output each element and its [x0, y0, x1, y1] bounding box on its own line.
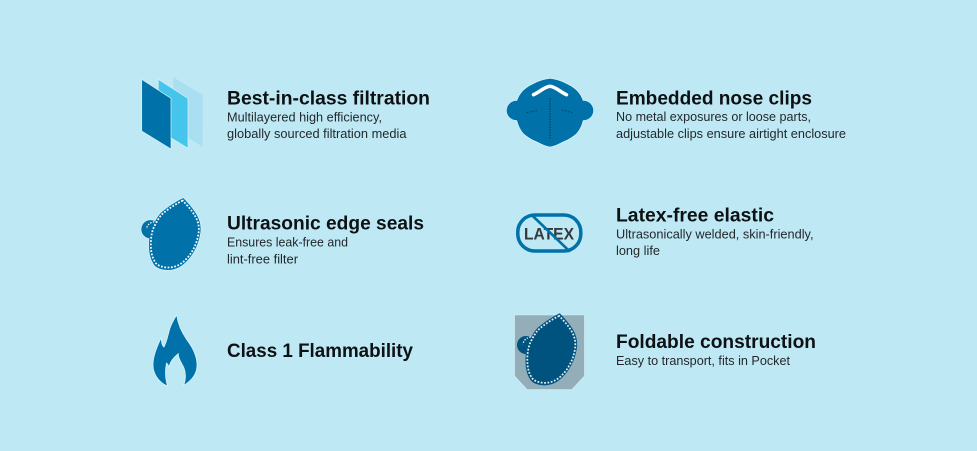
- icon: latex crossed out: [518, 215, 581, 252]
- text block: seals description: Ensures leak-free and: [227, 236, 348, 250]
- text block: nose clips description: [616, 110, 846, 141]
- heading: class 1 flammability: Class 1 Flammability: [227, 341, 413, 362]
- panel: best-in-class filtration: [142, 77, 430, 149]
- text block: elastic description: [616, 228, 814, 258]
- icon: latex crossed out: LATEX: [524, 224, 575, 244]
- icon: mask with nose clip: [506, 78, 594, 147]
- icon: mask with seal edge: [141, 198, 201, 270]
- text block: filtration description: Multilayered high efficiency,: [227, 110, 382, 124]
- panel: latex-free elastic: [518, 206, 814, 258]
- text block: filtration description: [227, 110, 407, 141]
- text block: filtration description: globally sourced filtration media: [227, 127, 407, 141]
- text block: foldable description: Easy to transport, fits in Pocket: [616, 354, 791, 368]
- panel: foldable construction: [514, 313, 816, 390]
- text block: elastic description: Ultrasonically welded, skin-friendly,: [616, 228, 814, 242]
- heading: foldable construction: Foldable construction: [616, 332, 816, 353]
- text block: nose clips description: adjustable clips ensure airtight enclosure: [616, 127, 846, 141]
- text block: elastic description: long life: [616, 244, 660, 258]
- icon: mask in pocket: [514, 313, 584, 390]
- heading: best-in-class filtration: Best-in-class filtration: [227, 88, 430, 110]
- panel: class 1 flammability: [153, 315, 413, 386]
- panel: embedded nose clips: [506, 78, 846, 147]
- heading: ultrasonic edge seals: Ultrasonic edge seals: [227, 214, 424, 234]
- panel: ultrasonic edge seals: [141, 198, 424, 270]
- text block: nose clips description: No metal exposures or loose parts,: [616, 110, 811, 124]
- text block: seals description: [227, 236, 348, 266]
- icon: flame: [153, 315, 197, 386]
- icon: filter layers: [142, 77, 203, 149]
- text block: seals description: lint-free filter: [227, 252, 298, 266]
- heading: embedded nose clips: Embedded nose clips: [616, 88, 812, 110]
- heading: latex-free elastic: Latex-free elastic: [616, 206, 774, 226]
